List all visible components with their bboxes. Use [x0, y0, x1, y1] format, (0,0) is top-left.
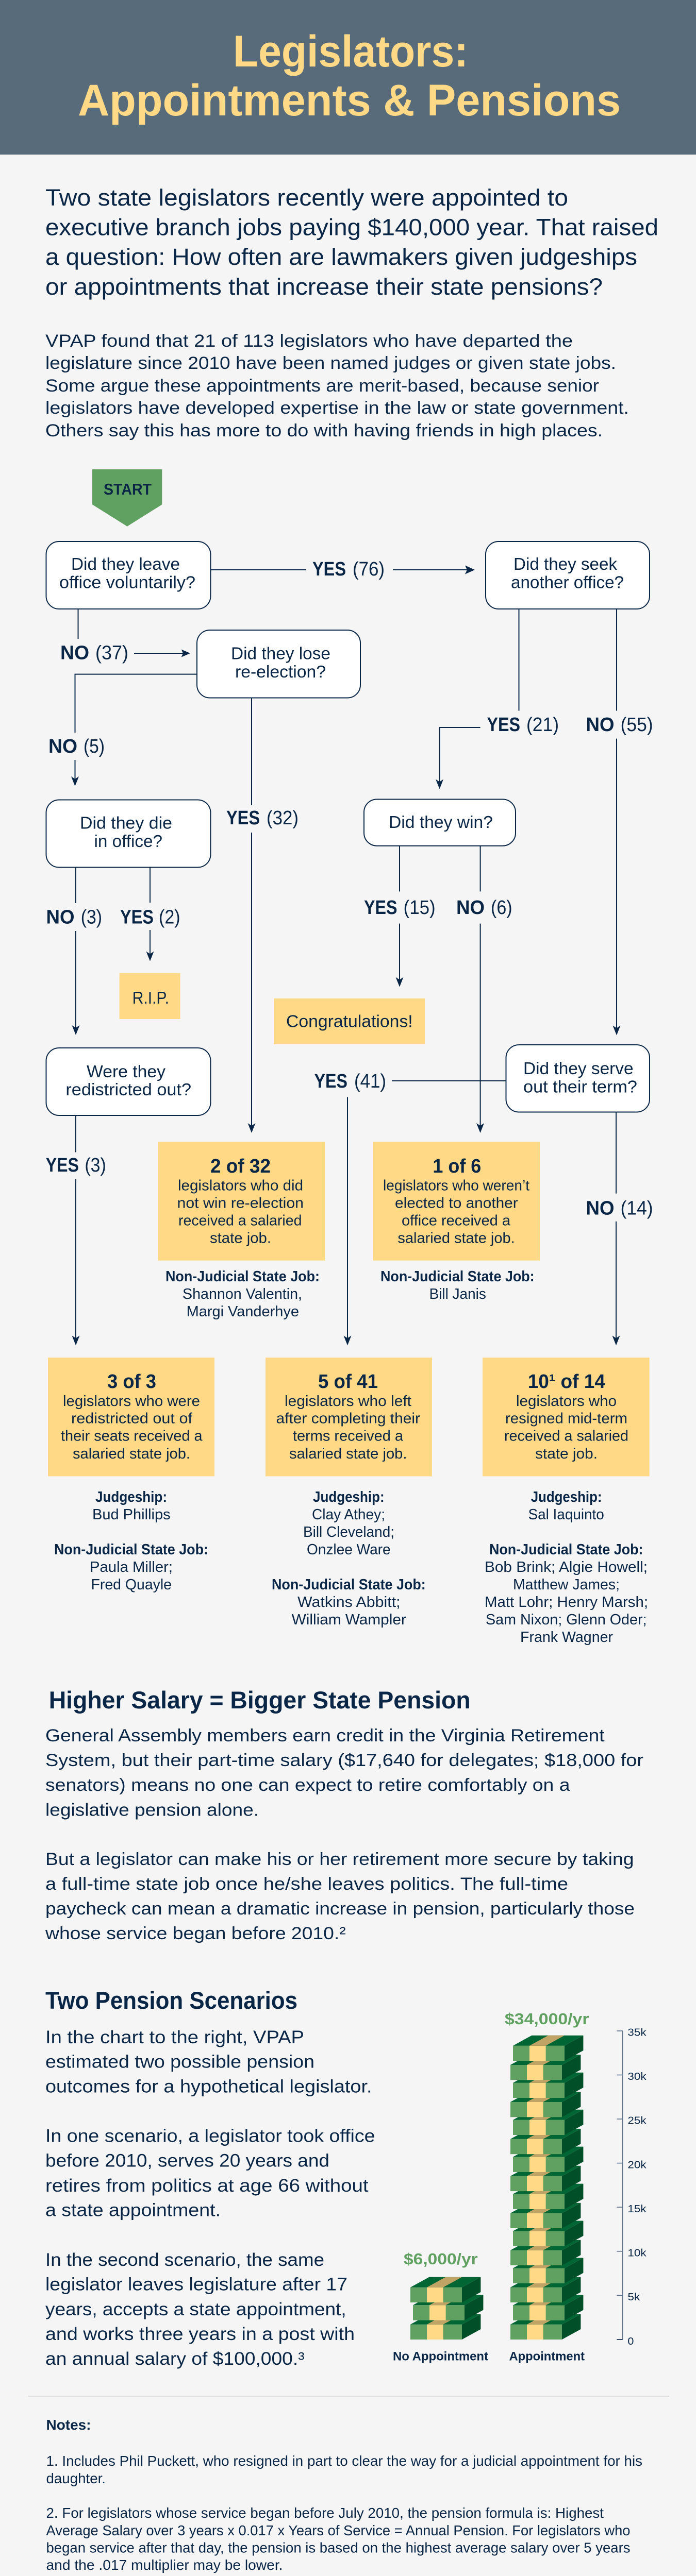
names: 3 of 3: Paula Miller;: [90, 1559, 173, 1575]
y axis: 5k: [627, 2292, 641, 2303]
question: serve term: out their term?: [523, 1077, 637, 1096]
y axis: 15k: [627, 2204, 647, 2215]
label: no 3: NO: [46, 907, 74, 928]
connector: die in office yes: [146, 868, 154, 961]
stack: appointment: [510, 2036, 583, 2340]
label: yes 76: (76): [353, 558, 385, 580]
y axis: [617, 2027, 647, 2347]
scenario text: [45, 2027, 375, 2369]
paragraph: full-time job: paycheck can mean a dramatic increase in pension, particularly those: [45, 1899, 635, 1919]
scenario text: years, accepts a state appointment,: [45, 2299, 346, 2319]
label: yes 32: YES: [226, 807, 260, 829]
label: yes 2: (2): [159, 907, 180, 928]
names: 5 of 41: Bill Cleveland;: [303, 1524, 394, 1540]
names: 5 of 41: Judgeship:: [313, 1489, 385, 1505]
names: 1 of 6: Bill Janis: [429, 1286, 486, 1302]
intro text: or appointments that increase their state pensions?: [45, 274, 603, 300]
y axis: 25k: [627, 2115, 647, 2127]
names: 3 of 3: Fred Quayle: [91, 1577, 172, 1593]
intro finding paragraph: legislature since 2010 have been named judges or given state jobs.: [45, 353, 616, 373]
names: 5 of 41: Non-Judicial State Job:: [272, 1577, 426, 1593]
label: yes 32: [226, 807, 299, 829]
label: no 37: (37): [95, 642, 128, 664]
names: 3 of 3: Bud Phillips: [92, 1506, 171, 1523]
label: yes 3: (3): [85, 1155, 106, 1176]
intro finding paragraph: [45, 331, 629, 440]
result card: 3 of 3: legislators who were: [63, 1393, 200, 1410]
names: 5 of 41: Clay Athey;: [312, 1506, 385, 1523]
names: 2 of 32: Non-Judicial State Job:: [165, 1268, 320, 1285]
names: 2 of 32: Margi Vanderhye: [187, 1303, 299, 1320]
label: yes 32: (32): [267, 807, 299, 829]
names: 5 of 41: Onzlee Ware: [307, 1541, 391, 1558]
result card: 3 of 3: redistricted out of: [71, 1410, 193, 1427]
paragraph: full-time job: But a legislator can make his or her retirement more secure by taking: [45, 1850, 634, 1869]
question: seek another office: Did they seek: [513, 554, 617, 573]
paragraph: full-time job: whose service began before 2010.²: [45, 1924, 346, 1943]
question: win: [364, 799, 516, 846]
names: 5 of 41: [272, 1489, 426, 1628]
label: no 37: [60, 642, 128, 664]
question: win: Did they win?: [389, 812, 493, 832]
label: yes 2: YES: [120, 907, 154, 928]
paragraph: pension explanation: legislative pension alone.: [45, 1800, 259, 1820]
label: yes 3: [46, 1155, 106, 1176]
paragraph: pension explanation: General Assembly members earn credit in the Virginia Retirement: [45, 1726, 605, 1745]
connector: die in office no: [72, 868, 79, 1035]
question: lose re-election: Did they lose: [231, 644, 330, 663]
result card: 2 of 32: not win re-election: [177, 1195, 304, 1212]
heading: higher salary: Higher Salary = Bigger State Pension: [49, 1686, 471, 1714]
question: redistricted: Were they: [87, 1062, 166, 1081]
label: yes 3: YES: [46, 1155, 79, 1176]
scenario text: retires from politics at age 66 without: [45, 2176, 369, 2196]
result card: 10 of 14: 10¹ of 14: [528, 1371, 605, 1393]
label: no 55: [586, 714, 653, 736]
outcome: rip: R.I.P.: [132, 988, 169, 1007]
connector: lose re-election yes: [247, 698, 256, 1133]
names: 2 of 32: Shannon Valentin,: [183, 1286, 302, 1302]
label: no 5: NO: [48, 736, 77, 757]
scenario text: outcomes for a hypothetical legislator.: [45, 2076, 372, 2097]
label: no 6: NO: [456, 897, 485, 919]
paragraph: full-time job: [45, 1850, 635, 1943]
result card: 10 of 14: [483, 1358, 650, 1477]
result card: 10 of 14: received a salaried: [504, 1428, 628, 1445]
names: 10 of 14: Frank Wagner: [520, 1629, 613, 1646]
outcome: congratulations: Congratulations!: [286, 1012, 413, 1031]
connector: leave voluntarily yes: [210, 566, 475, 574]
label: yes 76: [312, 558, 385, 580]
label: no 14: NO: [586, 1197, 615, 1219]
names: 2 of 32: [165, 1268, 320, 1320]
paragraph: pension explanation: System, but their part-time salary ($17,640 for delegates; $18,000 for: [45, 1751, 643, 1770]
scenario text: In one scenario, a legislator took office: [45, 2126, 375, 2146]
value label: 6000: $6,000/yr: [404, 2250, 478, 2268]
note 2: Average Salary over 3 years x 0.017 x Years of Service = Annual Pension. For legislators who: [46, 2522, 630, 2538]
scenario text: and works three years in a post with: [45, 2324, 355, 2344]
label: yes 41: YES: [314, 1071, 347, 1092]
result card: 5 of 41: 5 of 41: [318, 1371, 378, 1393]
note 2: 2. For legislators whose service began before July 2010, the pension formula is: Highest: [46, 2505, 604, 2521]
intro finding paragraph: VPAP found that 21 of 113 legislators who have departed the: [45, 331, 573, 351]
result card: 10 of 14: resigned mid-term: [505, 1410, 627, 1427]
result card: 3 of 3: 3 of 3: [107, 1371, 156, 1393]
result card: 2 of 32: legislators who did: [178, 1178, 303, 1194]
note 2: began service after that day, the pension is based on the highest average salary over 5 years: [46, 2540, 630, 2555]
label: yes 2: [120, 907, 180, 928]
result card: 1 of 6: legislators who weren’t: [383, 1178, 529, 1194]
connector: redistricted yes: [72, 1115, 79, 1345]
connector: seek office no: [612, 609, 621, 1036]
connector: serve term yes: [343, 1081, 506, 1345]
result card: 5 of 41: salaried state job.: [289, 1446, 407, 1462]
question: seek another office: [486, 541, 650, 609]
names: 1 of 6: Non-Judicial State Job:: [380, 1268, 535, 1285]
names: 3 of 3: Judgeship:: [95, 1489, 167, 1505]
result card: 5 of 41: legislators who left: [285, 1393, 411, 1410]
label: no 6: [456, 897, 512, 919]
y axis: 35k: [627, 2027, 647, 2038]
scenario text: a state appointment.: [45, 2200, 221, 2221]
stack: no appointment: [410, 2277, 483, 2340]
names: 5 of 41: Watkins Abbitt;: [297, 1594, 401, 1611]
category label: no appointment: No Appointment: [393, 2349, 488, 2364]
result card: 10 of 14: state job.: [535, 1446, 598, 1462]
paragraph: pension explanation: senators) means no one can expect to retire comfortably on a: [45, 1775, 570, 1795]
outcome: congratulations: [274, 998, 425, 1044]
names: 10 of 14: [485, 1489, 648, 1646]
result card: 2 of 32: received a salaried: [178, 1212, 302, 1229]
connector: win yes: [396, 846, 403, 987]
label: yes 21: YES: [487, 714, 520, 736]
question: lose re-election: re-election?: [235, 662, 326, 681]
scenario text: estimated two possible pension: [45, 2052, 314, 2072]
names: 3 of 3: Non-Judicial State Job:: [54, 1541, 208, 1558]
label: no 55: NO: [586, 714, 615, 736]
scenario text: an annual salary of $100,000.³: [45, 2349, 305, 2369]
note 1: 1. Includes Phil Puckett, who resigned in part to clear the way for a judicial appointment for his: [46, 2453, 642, 2469]
label: no 3: (3): [81, 907, 102, 928]
question: redistricted: [46, 1048, 210, 1115]
result card: 10 of 14: legislators who: [516, 1393, 617, 1410]
result card: 1 of 6: salaried state job.: [397, 1230, 515, 1247]
note 1: daughter.: [46, 2470, 106, 2486]
result card: 1 of 6: office received a: [402, 1212, 511, 1229]
result card: 5 of 41: terms received a: [293, 1428, 404, 1445]
question: lose re-election: [197, 630, 360, 698]
connector: serve term no: [612, 1112, 620, 1345]
question: redistricted: redistricted out?: [65, 1080, 191, 1099]
names: 10 of 14: Sal Iaquinto: [528, 1506, 604, 1523]
result card: 2 of 32: [158, 1142, 325, 1261]
scenario text: legislator leaves legislature after 17: [45, 2275, 347, 2295]
names: 10 of 14: Non-Judicial State Job:: [489, 1541, 643, 1558]
connector: leave voluntarily no: [78, 609, 190, 657]
y axis: 10k: [627, 2247, 647, 2259]
label: no 14: [586, 1197, 653, 1219]
heading: two pension scenarios: Two Pension Scenarios: [45, 1987, 297, 2014]
y axis: 30k: [627, 2071, 647, 2082]
header banner: [0, 0, 696, 155]
notes heading: Notes:: [46, 2417, 91, 2433]
result card: 3 of 3: salaried state job.: [73, 1446, 190, 1462]
label: yes 41: [314, 1071, 386, 1092]
intro text: executive branch jobs paying $140,000 year. That raised: [45, 214, 658, 240]
label: no 14: (14): [621, 1197, 653, 1219]
label: no 3: [46, 907, 102, 928]
question: leave voluntarily: office voluntarily?: [59, 573, 195, 591]
question: serve term: [506, 1045, 650, 1112]
y axis: 0: [627, 2336, 634, 2347]
category label: appointment: Appointment: [509, 2349, 585, 2364]
question: die in office: [46, 800, 210, 868]
intro text: Two state legislators recently were appointed to: [45, 184, 568, 211]
label: yes 15: YES: [364, 897, 397, 919]
note 2: and the .017 multiplier may be lower.: [46, 2557, 283, 2573]
intro text: [45, 184, 658, 300]
names: 1 of 6: [380, 1268, 535, 1302]
label: yes 76: YES: [312, 558, 346, 580]
outcome: rip: [120, 973, 180, 1019]
paragraph: full-time job: a full-time state job once he/she leaves politics. The full-time: [45, 1874, 568, 1894]
names: 10 of 14: Sam Nixon; Glenn Oder;: [486, 1612, 647, 1628]
label: yes 21: (21): [526, 714, 559, 736]
names: 5 of 41: William Wampler: [292, 1612, 406, 1628]
note 2: [46, 2505, 630, 2573]
connector: lose re-election no: [71, 674, 197, 786]
label: yes 21: [487, 714, 559, 736]
label: no 6: (6): [491, 897, 512, 919]
question: leave voluntarily: [46, 541, 210, 609]
title: Legislators:: [233, 27, 468, 76]
scenario text: In the second scenario, the same: [45, 2250, 324, 2270]
names: 3 of 3: [54, 1489, 208, 1593]
chart: pension money stacks: [393, 2010, 647, 2364]
question: leave voluntarily: Did they leave: [71, 554, 180, 573]
result card: 1 of 6: elected to another: [395, 1195, 518, 1212]
names: 10 of 14: Judgeship:: [531, 1489, 602, 1505]
title: [78, 27, 621, 125]
result card: 1 of 6: [373, 1142, 540, 1261]
names: 10 of 14: Matthew James;: [513, 1577, 620, 1593]
result card: 2 of 32: state job.: [210, 1230, 271, 1247]
note 1: [46, 2453, 642, 2486]
result card: 2 of 32: 2 of 32: [210, 1156, 271, 1177]
label: no 55: (55): [621, 714, 653, 736]
question: die in office: in office?: [94, 832, 162, 851]
result card: 5 of 41: after completing their: [276, 1410, 420, 1427]
label: yes 41: (41): [354, 1071, 386, 1092]
question: serve term: Did they serve: [523, 1059, 634, 1078]
label: no 37: NO: [60, 642, 89, 664]
y axis: 20k: [627, 2159, 647, 2171]
intro text: a question: How often are lawmakers given judgeships: [45, 244, 637, 270]
label: no 5: (5): [84, 736, 105, 757]
notes: [46, 2417, 649, 2576]
scenario text: In the chart to the right, VPAP: [45, 2027, 304, 2047]
title: Appointments & Pensions: [78, 76, 621, 125]
names: 10 of 14: Matt Lohr; Henry Marsh;: [485, 1594, 648, 1611]
connector: win no: [476, 846, 484, 1133]
start marker: START: [104, 480, 152, 498]
names: 10 of 14: Bob Brink; Algie Howell;: [485, 1559, 648, 1575]
paragraph: pension explanation: [45, 1726, 643, 1820]
result card: 5 of 41: [266, 1358, 432, 1477]
intro finding paragraph: Others say this has more to do with having friends in high places.: [45, 421, 603, 440]
question: die in office: Did they die: [80, 814, 172, 833]
intro finding paragraph: Some argue these appointments are merit-based, because senior: [45, 376, 599, 396]
connector: seek office yes: [436, 609, 519, 789]
scenario text: before 2010, serves 20 years and: [45, 2150, 329, 2171]
result card: 3 of 3: their seats received a: [61, 1428, 203, 1445]
intro finding paragraph: legislators have developed expertise in the law or state government.: [45, 398, 629, 418]
label: no 5: [48, 736, 105, 757]
value label: 34000: $34,000/yr: [505, 2010, 589, 2028]
start marker: [92, 469, 162, 527]
result card: 1 of 6: 1 of 6: [433, 1156, 481, 1177]
question: seek another office: another office?: [511, 573, 624, 591]
label: yes 15: (15): [404, 897, 436, 919]
label: yes 15: [364, 897, 436, 919]
result card: 3 of 3: [48, 1358, 214, 1477]
